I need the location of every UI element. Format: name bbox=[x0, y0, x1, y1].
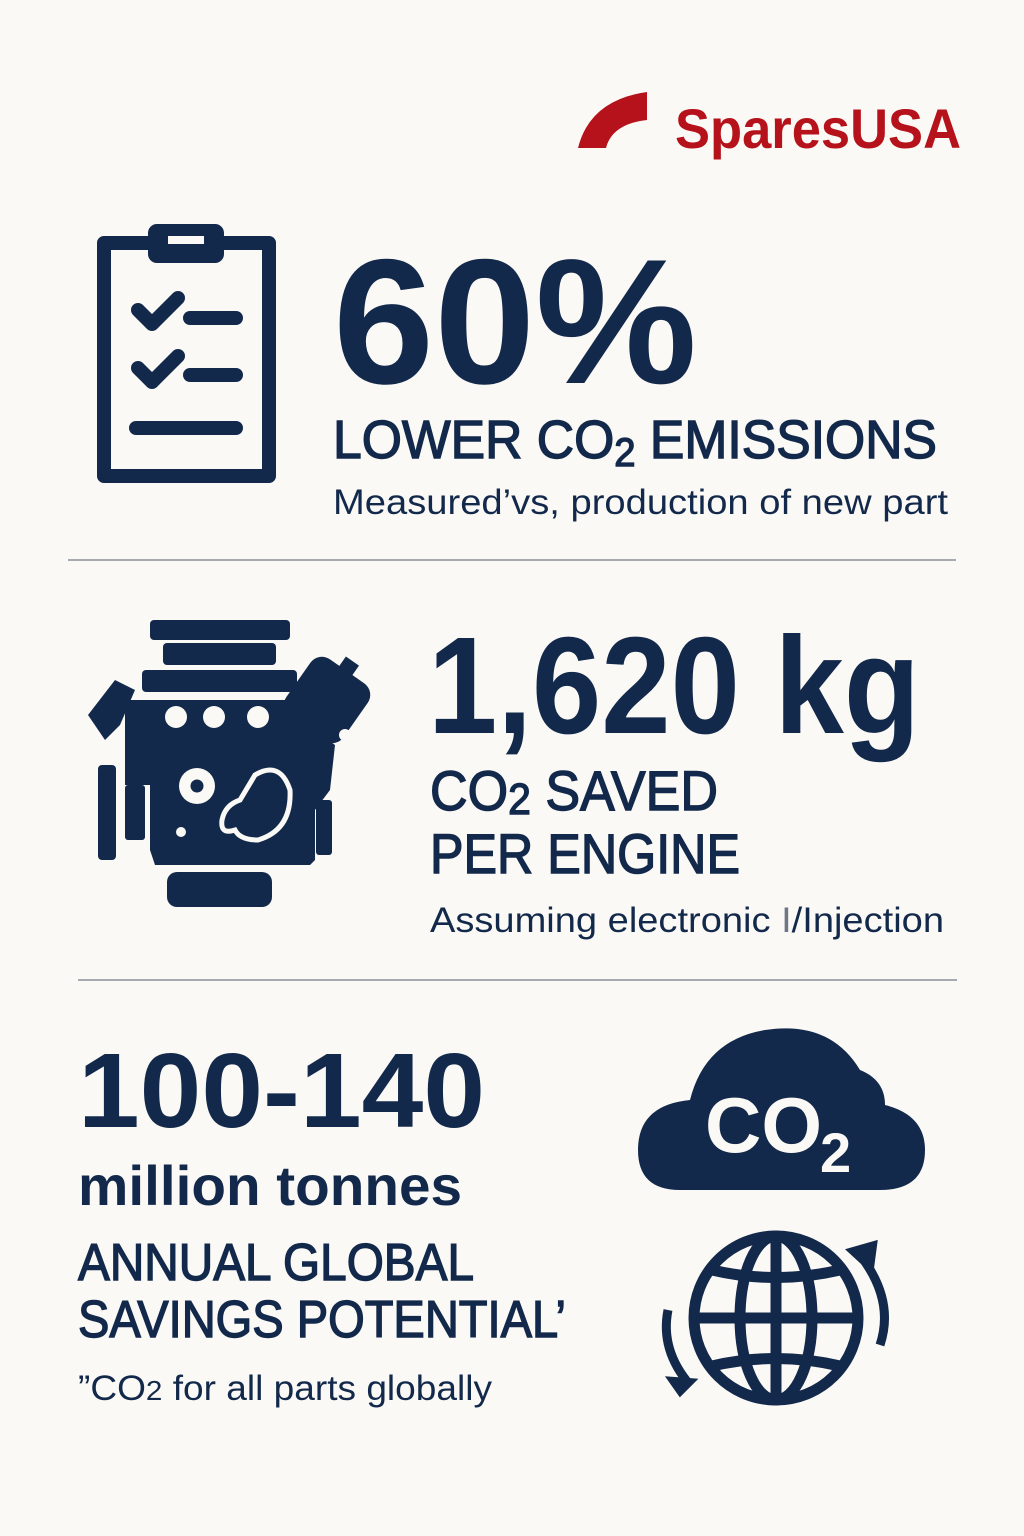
note: ”CO2 for all parts globally bbox=[78, 1369, 493, 1408]
icon: CO2 cloud: 2 bbox=[820, 1121, 851, 1184]
note: Measured’vs, production of new part bbox=[333, 483, 948, 522]
icon: CO2 cloud bbox=[638, 1028, 925, 1190]
icon: globe with arrows bbox=[666, 1236, 884, 1400]
label: lower CO2 emissions: EMISSIONS bbox=[636, 410, 937, 470]
label: lower CO2 emissions: LOWER CO bbox=[333, 410, 627, 470]
stat 2: 1,620 kg: PER ENGINE bbox=[430, 822, 740, 885]
stat 3: 100-140 million tonnes: 100-140 bbox=[78, 1032, 485, 1150]
icon: engine bbox=[88, 620, 376, 907]
label: annual global savings potential: ANNUAL GLOBAL bbox=[78, 1234, 474, 1292]
label: lower CO2 emissions: 2 bbox=[614, 431, 636, 475]
stat 1: 60% bbox=[333, 222, 948, 522]
note: Assuming electronic I/Injection bbox=[430, 901, 944, 940]
icon: CO2 cloud: CO bbox=[705, 1081, 822, 1169]
stat 3: 100-140 million tonnes bbox=[78, 1032, 566, 1408]
stat 2: 1,620 kg bbox=[428, 609, 944, 940]
logo: SparesUSA: SparesUSA bbox=[675, 97, 961, 160]
label: CO2 saved per engine: 2 bbox=[508, 775, 531, 824]
icon: clipboard checklist bbox=[104, 227, 269, 476]
stat 3: 100-140 million tonnes: million tonnes bbox=[78, 1154, 462, 1217]
stat 2: 1,620 kg: 1,620 kg bbox=[428, 609, 920, 763]
stat 1: 60%: 60% bbox=[333, 222, 697, 421]
label: CO2 saved per engine: SAVED bbox=[531, 759, 718, 822]
stat 3: 100-140 million tonnes: SAVINGS POTENTIAL’ bbox=[78, 1291, 566, 1349]
label: CO2 saved per engine: CO bbox=[430, 759, 514, 822]
logo: SparesUSA bbox=[578, 92, 961, 160]
